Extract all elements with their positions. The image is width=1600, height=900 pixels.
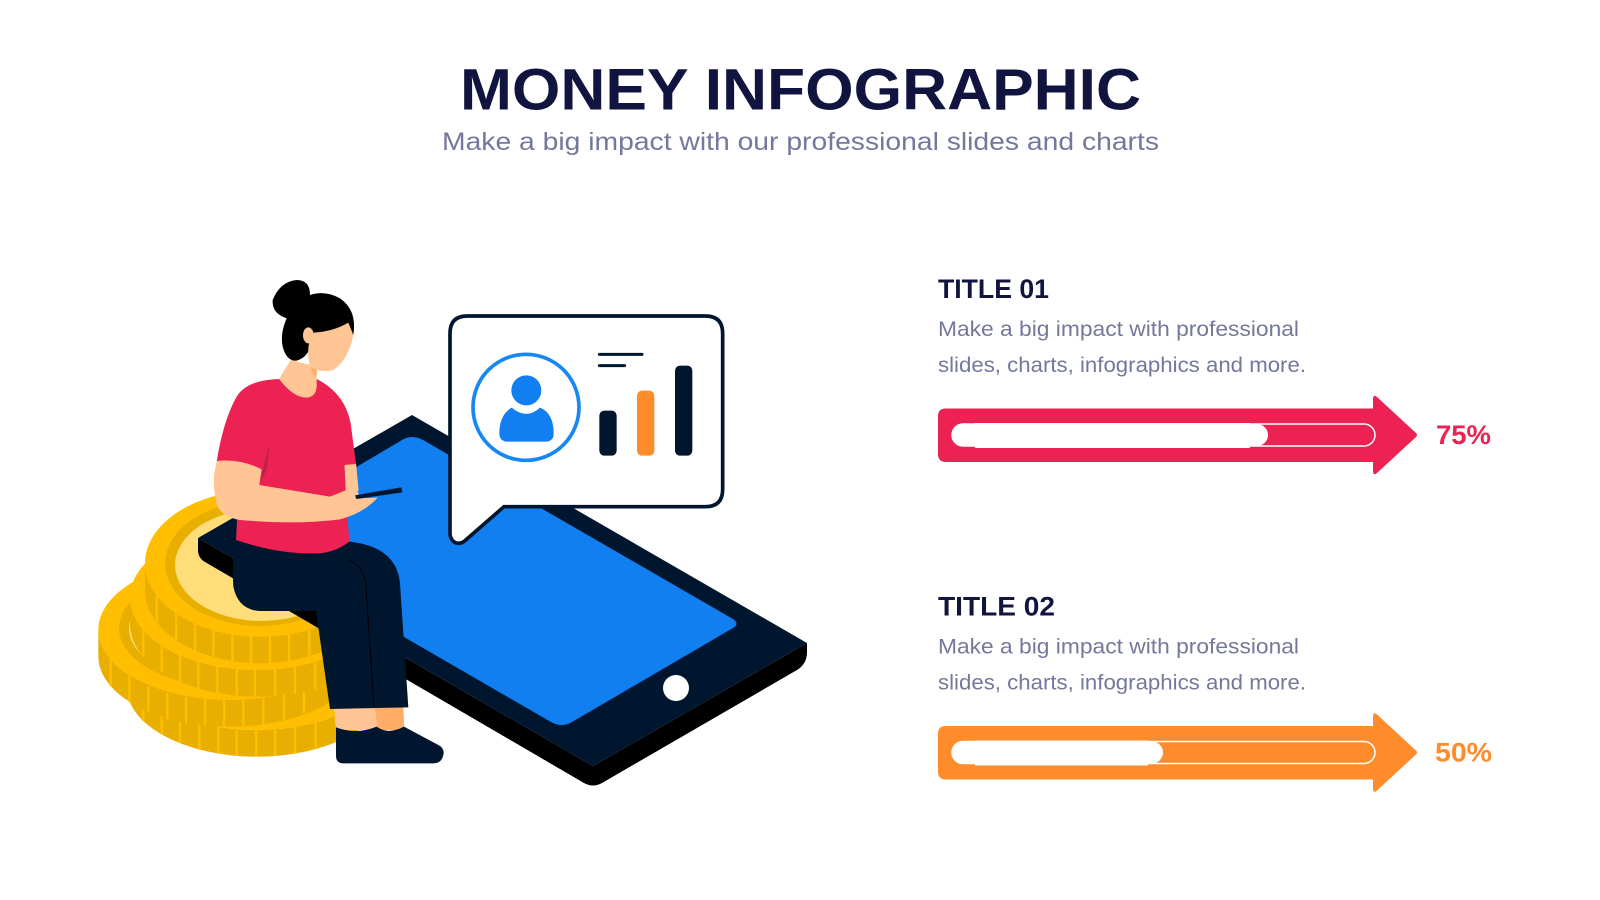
coin: bottom <box>127 590 387 757</box>
shoes <box>336 727 444 763</box>
neck shadow <box>311 367 317 377</box>
heading 02: TITLE 02 <box>938 592 1055 622</box>
sleeve folds <box>259 442 270 484</box>
illustration: coin stack <box>98 490 387 757</box>
coin: middle <box>130 525 383 697</box>
illustration: tablet <box>198 415 807 786</box>
leg skin <box>334 707 404 730</box>
mini chart <box>599 354 692 456</box>
tablet face <box>198 415 807 766</box>
description 01: Make a big impact with professional <box>938 318 1299 341</box>
tablet screen <box>240 437 736 725</box>
coin: top <box>145 490 375 663</box>
arm <box>214 460 378 522</box>
far arm <box>344 463 359 492</box>
arrow progress 75% <box>938 396 1417 474</box>
tablet button <box>663 675 689 701</box>
subtitle: Make a big impact with our professional slides and charts <box>442 128 1159 156</box>
arrow progress 50% <box>938 713 1417 792</box>
neck <box>279 360 317 398</box>
description 02: slides, charts, infographics and more. <box>938 672 1306 694</box>
hair back and bun <box>273 280 354 361</box>
trousers <box>233 540 408 709</box>
illustration: woman lower body <box>233 540 444 763</box>
coin: lower left <box>98 559 362 727</box>
face <box>308 323 353 371</box>
phone <box>355 487 402 499</box>
description 02: Make a big impact with professional <box>938 636 1299 658</box>
illustration: woman upper body <box>214 280 402 553</box>
panel: title 02 <box>938 592 1492 792</box>
description 02 <box>938 636 1306 694</box>
ear <box>303 327 314 343</box>
value 75%: 75% <box>1436 420 1491 450</box>
bubble outline <box>450 316 723 543</box>
heading 01: TITLE 01 <box>938 274 1049 304</box>
title: MONEY INFOGRAPHIC <box>460 58 1141 122</box>
value 50%: 50% <box>1435 738 1492 768</box>
icon: user avatar <box>473 354 579 460</box>
description 01: slides, charts, infographics and more. <box>938 354 1306 377</box>
tablet side <box>198 538 807 786</box>
shirt <box>217 379 356 553</box>
trousers crease <box>347 559 374 707</box>
description 01 <box>938 318 1306 377</box>
panel: title 01 <box>938 274 1491 474</box>
speech bubble <box>450 316 723 543</box>
